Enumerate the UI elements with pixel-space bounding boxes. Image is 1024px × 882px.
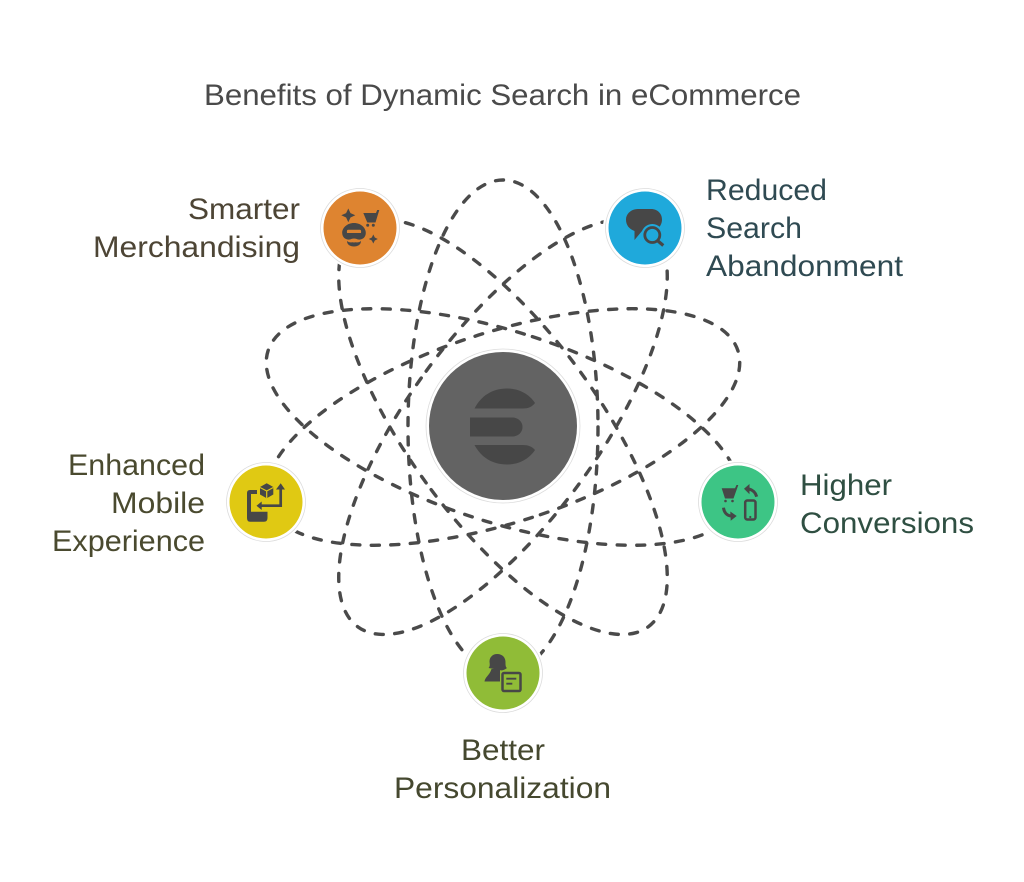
icon: phone, box and arrow (247, 483, 285, 522)
node: Reduced Search Abandonment (603, 186, 687, 270)
label: Smarter Merchandising (93, 193, 300, 264)
node: Enhanced Mobile Experience (224, 460, 308, 544)
label: Better Personalization (394, 734, 611, 805)
icon: speech bubble with magnifier (626, 209, 663, 246)
label: Reduced Search Abandonment: Abandonment (706, 250, 904, 283)
label: Higher Conversions: Conversions (800, 507, 974, 540)
icon: person with note (484, 654, 523, 692)
central hub with logo (421, 344, 585, 508)
icon: cart to phone arrows (722, 484, 757, 521)
label: Better Personalization: Personalization (394, 772, 611, 805)
label: Reduced Search Abandonment (706, 174, 904, 283)
node: Smarter Merchandising (318, 186, 402, 270)
label: Enhanced Mobile Experience: Enhanced (68, 449, 205, 482)
label: Higher Conversions: Higher (800, 469, 892, 502)
node: Better Personalization (461, 631, 545, 715)
label: Reduced Search Abandonment: Reduced (706, 174, 827, 207)
icon: sparkles, cart and masked shopper (341, 208, 379, 246)
label: Reduced Search Abandonment: Search (706, 212, 802, 245)
node: Higher Conversions (696, 460, 780, 544)
label: Smarter Merchandising: Merchandising (93, 231, 300, 264)
title: Benefits of Dynamic Search in eCommerce (204, 79, 801, 112)
label: Enhanced Mobile Experience: Mobile (111, 487, 205, 520)
orbit ellipses (239, 171, 767, 683)
label: Better Personalization: Better (461, 734, 545, 767)
label: Higher Conversions (800, 469, 974, 540)
label: Enhanced Mobile Experience (52, 449, 205, 558)
label: Smarter Merchandising: Smarter (188, 193, 300, 226)
label: Enhanced Mobile Experience: Experience (52, 525, 205, 558)
